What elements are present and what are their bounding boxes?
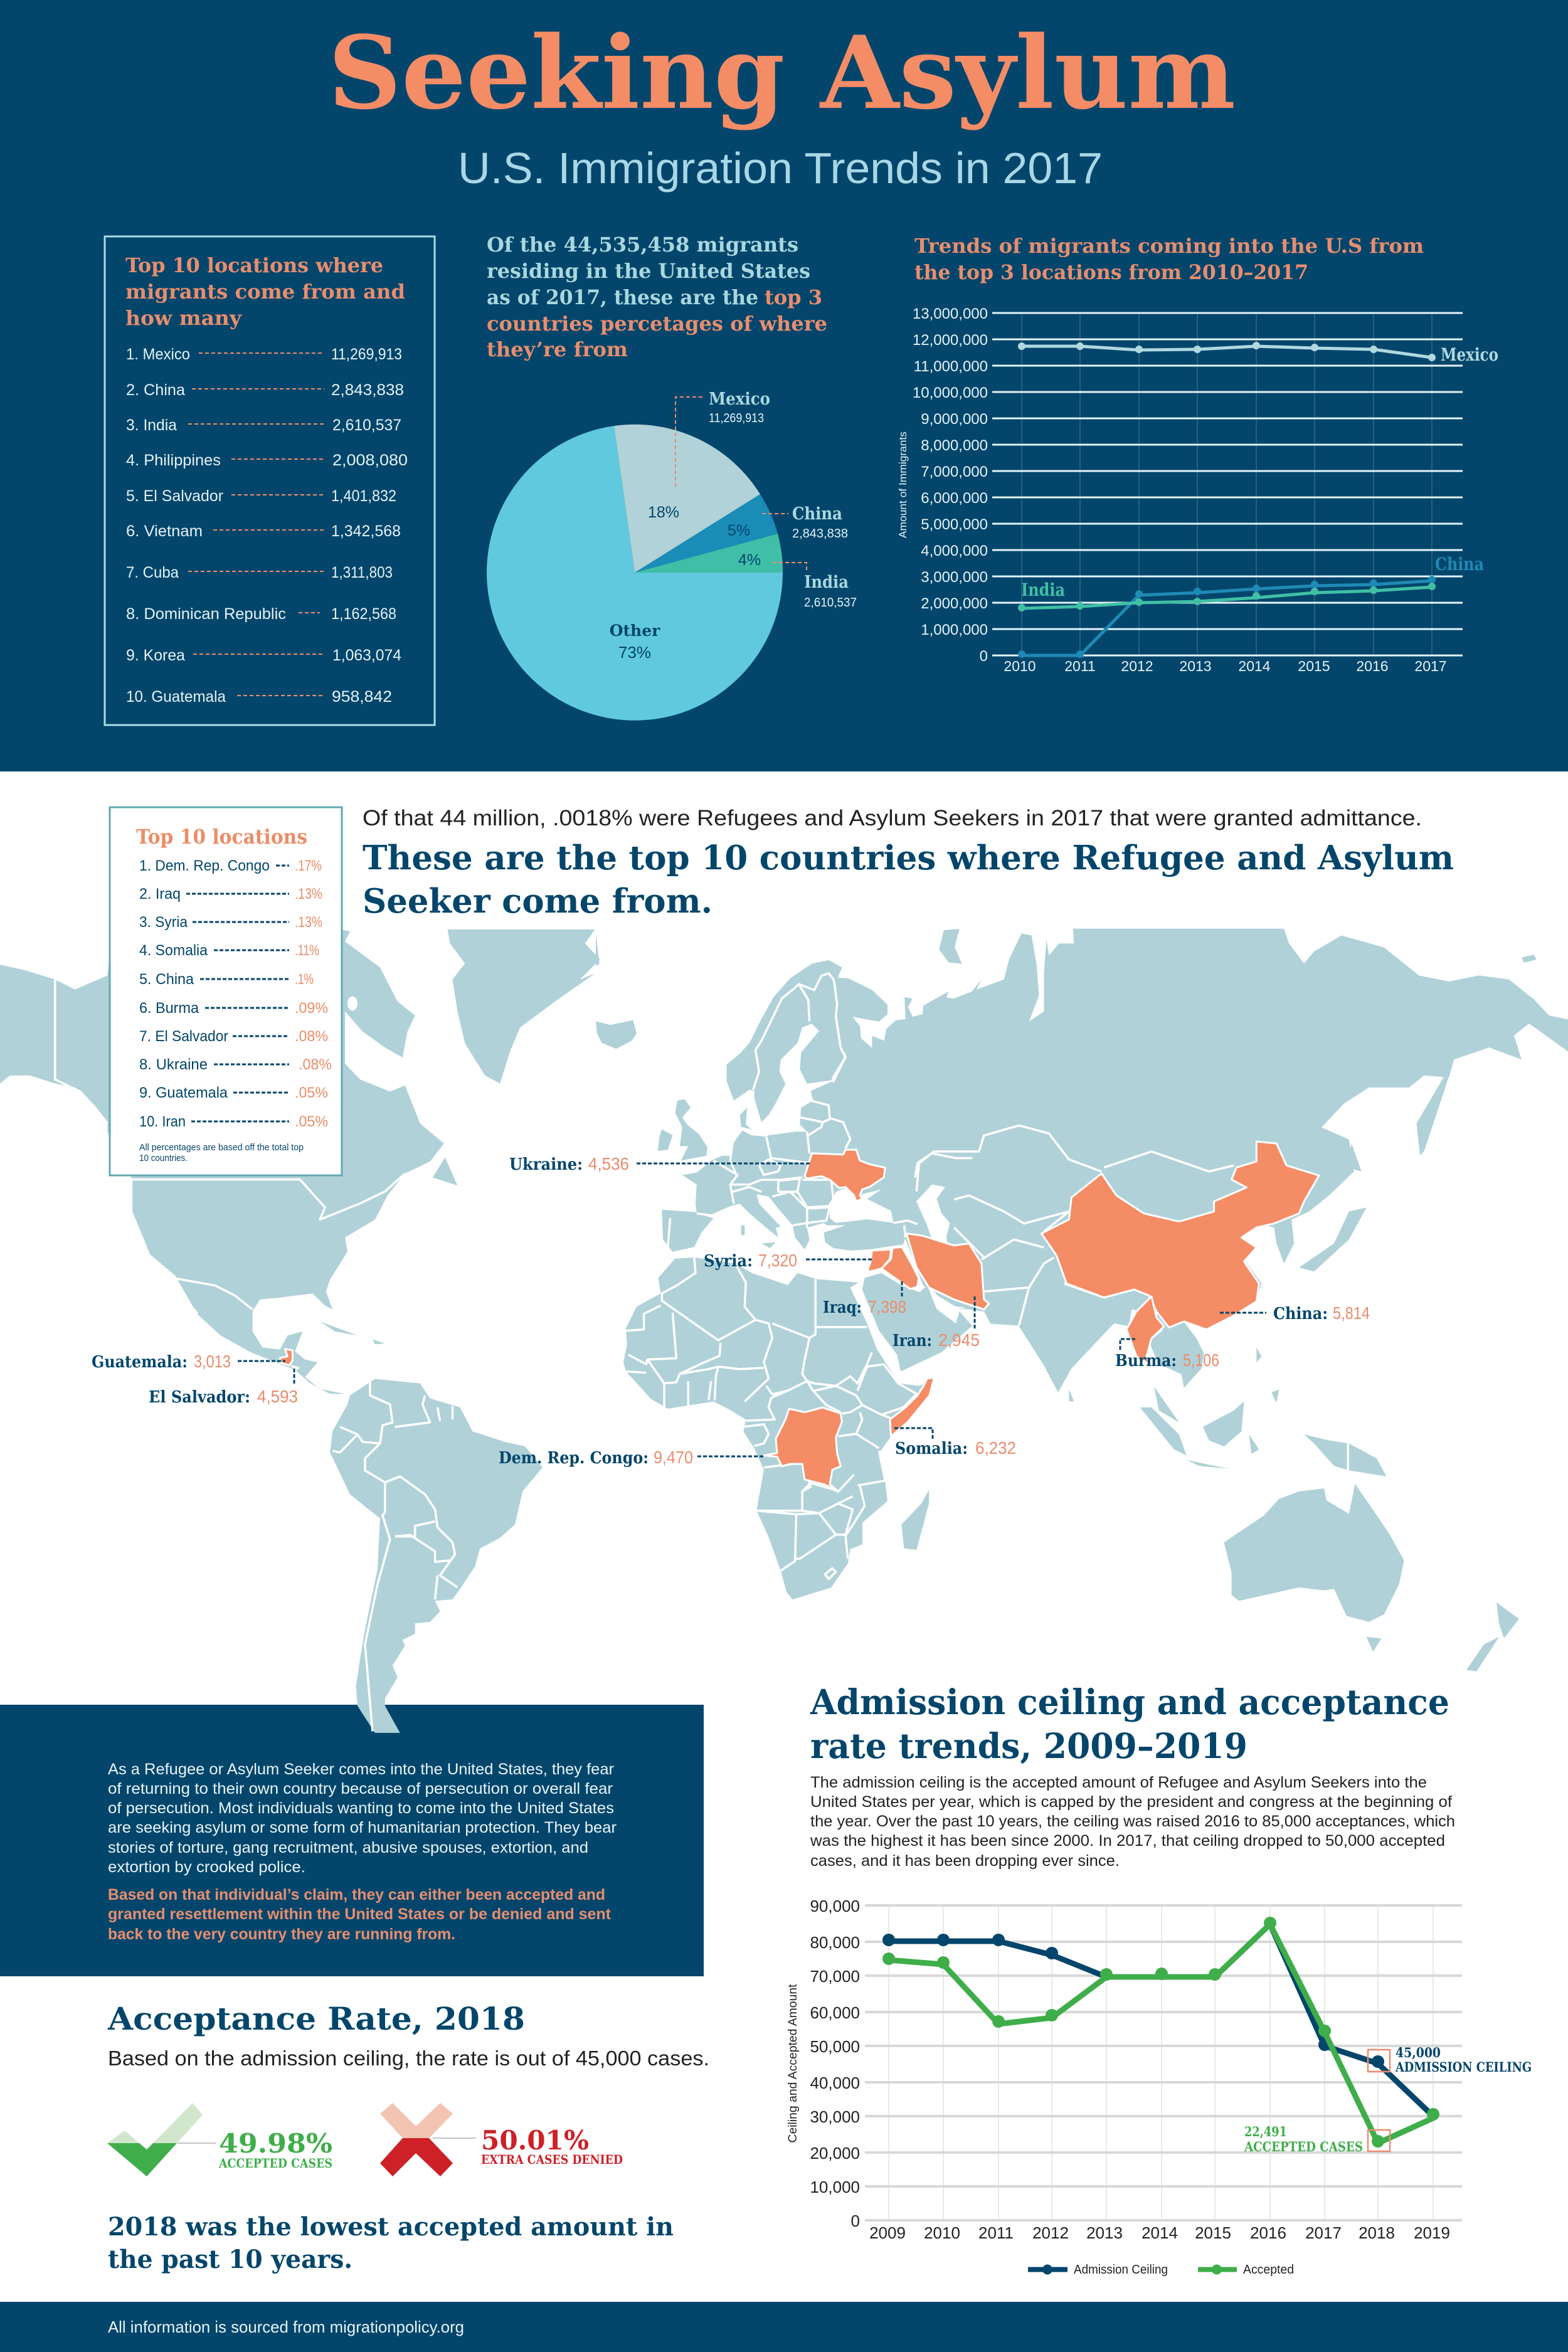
stat: accepted cases: ACCEPTED CASES xyxy=(218,2156,332,2171)
section heading: These are the top 10 countries where Refugee and Asylum xyxy=(363,839,1454,877)
admission ceiling paragraph: the year. Over the past 10 years, the ceiling was raised 2016 to 85,000 acceptances, which xyxy=(810,1813,1455,1830)
map callout: Syria: Syria: xyxy=(704,1252,753,1271)
line chart: admission ceiling vs accepted: 2012 xyxy=(1032,2223,1069,2242)
line chart: migrant trends: 2016 xyxy=(1356,658,1389,674)
pie label: Mexico: Mexico xyxy=(709,389,770,409)
refugee share rows: .09% xyxy=(295,1000,328,1017)
legend xyxy=(1028,2263,1294,2277)
line chart: admission ceiling vs accepted xyxy=(787,1897,1532,2277)
highlighted text: granted resettlement within the United States or be denied and sent xyxy=(108,1905,612,1923)
axis label: Ceiling and Accepted Amount xyxy=(787,1984,800,2143)
pie label: India: India xyxy=(804,573,849,592)
migrant count rows: 2,610,537 xyxy=(332,416,401,434)
country: Dem. Rep. Congo xyxy=(764,1407,842,1490)
refugee share rows: .13% xyxy=(295,886,322,903)
icon: x mark xyxy=(380,2103,476,2176)
line chart: migrant trends: 10,000,000 xyxy=(913,384,988,401)
stat: denied cases: 50.01% xyxy=(481,2125,589,2156)
admission ceiling paragraph: The admission ceiling is the accepted amount of Refugee and Asylum Seekers into the xyxy=(810,1774,1427,1791)
line chart: admission ceiling vs accepted: 60,000 xyxy=(810,2003,860,2022)
legend: Accepted xyxy=(1243,2263,1294,2277)
pie heading: residing in the United States xyxy=(487,259,810,283)
footnote: All percentages are based off the total top xyxy=(139,1142,304,1153)
map callout: Syria xyxy=(704,1251,872,1271)
map callout: Burma xyxy=(1115,1339,1219,1370)
line chart: migrant trends: 7,000,000 xyxy=(921,464,988,480)
line chart: migrant trends: 2010 xyxy=(1004,658,1036,674)
map callout: El Salvador: El Salvador: xyxy=(149,1388,250,1407)
pie label: Mexico: 11,269,913 xyxy=(709,411,764,425)
pie chart: 4% xyxy=(738,551,761,569)
stat: accepted cases: 49.98% xyxy=(219,2128,332,2159)
pie heading: they’re from xyxy=(487,337,628,361)
line chart: admission ceiling vs accepted: 0 xyxy=(851,2212,860,2230)
map callout: Dem. Rep. Congo xyxy=(499,1448,764,1468)
line chart: admission ceiling vs accepted: 90,000 xyxy=(810,1897,860,1915)
pie heading: Of the 44,535,458 migrants xyxy=(487,233,798,257)
country: Ukraine xyxy=(805,1150,885,1201)
line chart: migrant trends: 12,000,000 xyxy=(913,332,988,349)
map callout: China xyxy=(1220,1303,1370,1323)
header panel xyxy=(0,0,1568,771)
line chart: migrant trends: 13,000,000 xyxy=(913,305,988,322)
panel: refugee context text: extortion by crooked police. xyxy=(108,1858,305,1876)
stat: denied cases: EXTRA CASES DENIED xyxy=(481,2152,623,2167)
pie label: China: 2,843,838 xyxy=(792,527,848,541)
migrant count rows: 958,842 xyxy=(332,688,392,706)
world map xyxy=(0,929,1568,1733)
map callout: Iran xyxy=(893,1296,980,1350)
country: Syria xyxy=(867,1249,891,1272)
pie heading: as of 2017, these are the xyxy=(487,285,758,309)
country: El Salvador xyxy=(292,1366,299,1370)
series: China xyxy=(1018,576,1436,658)
refugee share rows: 3. Syria xyxy=(139,914,188,931)
panel: refugee context text: stories of torture, gang recruitment, abusive spouses, extortion, and xyxy=(108,1839,588,1857)
line chart: admission ceiling vs accepted: 2017 xyxy=(1305,2223,1342,2242)
refugee share rows: .11% xyxy=(295,942,319,959)
line chart: migrant trends: 2011 xyxy=(1064,658,1096,674)
series label: Mexico: Mexico xyxy=(1441,344,1498,365)
panel: top 10 refugee locations xyxy=(110,807,342,1175)
migrant count rows: 2,008,080 xyxy=(332,452,408,469)
country: Guatemala xyxy=(280,1349,292,1365)
line chart: admission ceiling vs accepted: 2015 xyxy=(1195,2223,1231,2242)
line chart: migrant trends: 8,000,000 xyxy=(921,437,988,454)
line chart: migrant trends: 9,000,000 xyxy=(921,411,988,428)
refugee share rows: .13% xyxy=(295,914,322,931)
refugee share rows: 5. China xyxy=(139,971,194,988)
map callout: Iraq: 7,398 xyxy=(868,1297,906,1316)
map callout: Somalia xyxy=(894,1428,1016,1458)
line chart: admission ceiling vs accepted: 2019 xyxy=(1414,2223,1450,2242)
line chart heading: Trends of migrants coming into the U.S from xyxy=(914,234,1424,258)
pie heading: top 3 xyxy=(765,285,822,309)
admission ceiling paragraph: was the highest it has been since 2000. In 2017, that ceiling dropped to 50,000 accepted xyxy=(810,1832,1445,1850)
series: admission ceiling xyxy=(882,1924,1433,2116)
line chart: admission ceiling vs accepted: 10,000 xyxy=(810,2178,860,2196)
line chart: migrant trends: 2012 xyxy=(1121,658,1153,674)
country: China xyxy=(1042,1142,1319,1330)
highlight boxes xyxy=(1368,2050,1390,2151)
refugee share rows: 2. Iraq xyxy=(139,886,181,903)
refugee share rows: .17% xyxy=(295,857,322,874)
panel: refugee context text: of returning to their own country because of persecution or overall fear xyxy=(108,1780,613,1798)
map callout: Ukraine: Ukraine: xyxy=(509,1155,583,1174)
line chart: admission ceiling vs accepted: 80,000 xyxy=(810,1933,860,1952)
migrant count rows: 5. El Salvador xyxy=(126,487,223,505)
migrant count rows: 4. Philippines xyxy=(126,452,221,469)
conclusion text: the past 10 years. xyxy=(108,2245,352,2274)
line chart: migrant trends: 1,000,000 xyxy=(921,622,988,638)
conclusion text: 2018 was the lowest accepted amount in xyxy=(108,2212,674,2242)
callout: accepted cases: 22,491 xyxy=(1244,2124,1287,2139)
line chart: migrant trends: 4,000,000 xyxy=(921,543,988,559)
line chart: admission ceiling vs accepted: 2018 xyxy=(1359,2223,1395,2242)
map callout: Iraq xyxy=(823,1281,906,1317)
migrant count rows: 1. Mexico xyxy=(126,346,190,363)
map callout: China: China: xyxy=(1273,1305,1328,1323)
line chart: admission ceiling vs accepted: 2010 xyxy=(924,2223,960,2242)
map callout: Burma: 5,106 xyxy=(1183,1350,1219,1370)
map callout: Ukraine xyxy=(509,1154,812,1174)
migrant count rows xyxy=(126,346,408,706)
line chart: migrant trends: 6,000,000 xyxy=(921,490,988,507)
intro sentence: Of that 44 million, .0018% were Refugees and Asylum Seekers in 2017 that were granted admittance. xyxy=(363,806,1422,830)
migrant count rows: 2,843,838 xyxy=(331,381,404,399)
series label: India: India xyxy=(1021,580,1065,600)
map callout: Iran: 2,945 xyxy=(938,1330,980,1350)
line chart: migrant trends xyxy=(897,305,1498,674)
pie heading: countries percetages of where xyxy=(487,312,827,336)
refugee share rows: 9. Guatemala xyxy=(139,1084,228,1101)
stat: accepted cases xyxy=(218,2128,332,2171)
series: Mexico xyxy=(1018,342,1436,361)
title: Seeking Asylum xyxy=(328,14,1236,132)
series label: China: China xyxy=(1435,554,1484,575)
acceptance rate sentence: Based on the admission ceiling, the rate is out of 45,000 cases. xyxy=(108,2047,709,2070)
panel: top 10 migrant locations xyxy=(105,236,435,725)
line chart: admission ceiling vs accepted: 2014 xyxy=(1142,2223,1178,2242)
migrant count rows: 1,401,832 xyxy=(331,487,396,505)
line chart: migrant trends: 0 xyxy=(980,648,988,665)
map callout: Somalia: 6,232 xyxy=(975,1438,1016,1458)
line chart: admission ceiling vs accepted: 2013 xyxy=(1086,2223,1123,2242)
series: India xyxy=(1018,583,1436,612)
migrant count rows: 1,311,803 xyxy=(331,564,393,581)
series: accepted xyxy=(882,1917,1439,2148)
line chart: admission ceiling vs accepted: 70,000 xyxy=(810,1967,860,1986)
migrant count rows: 9. Korea xyxy=(126,647,185,664)
refugee share rows: .08% xyxy=(295,1028,328,1045)
list heading: how many xyxy=(125,306,242,330)
migrant count rows: 6. Vietnam xyxy=(126,522,203,540)
map callout: Guatemala xyxy=(92,1352,285,1372)
refugee share rows: 10. Iran xyxy=(139,1113,186,1130)
stat: denied cases xyxy=(481,2125,623,2167)
highlighted text: Based on that individual’s claim, they can either been accepted and xyxy=(108,1886,605,1904)
legend: Admission Ceiling xyxy=(1074,2263,1168,2277)
icon: check mark xyxy=(107,2103,216,2176)
migrant count rows: 10. Guatemala xyxy=(126,688,226,706)
map callout: Dem. Rep. Congo: 9,470 xyxy=(654,1448,693,1467)
line chart: admission ceiling vs accepted: 40,000 xyxy=(810,2074,860,2092)
list heading: migrants come from and xyxy=(125,280,405,304)
pie chart: Other xyxy=(610,622,660,640)
line chart: migrant trends: 2017 xyxy=(1414,658,1447,674)
line chart: admission ceiling vs accepted: 20,000 xyxy=(810,2144,860,2163)
pie label: India: 2,610,537 xyxy=(804,596,857,610)
line chart: migrant trends: 2015 xyxy=(1298,658,1330,674)
refugee share rows xyxy=(139,857,332,1130)
country: Iran xyxy=(906,1234,989,1310)
line chart: migrant trends: 5,000,000 xyxy=(921,516,988,533)
heading: admission ceiling: Admission ceiling and acceptance xyxy=(810,1682,1449,1722)
map callout: Ukraine: 4,536 xyxy=(588,1154,629,1173)
pie label: China: China xyxy=(792,504,842,524)
map callout: Burma: Burma: xyxy=(1115,1352,1177,1370)
refugee share rows: 7. El Salvador xyxy=(139,1028,228,1045)
line chart: migrant trends: 2,000,000 xyxy=(921,595,988,612)
map callout: Guatemala: Guatemala: xyxy=(92,1353,188,1372)
migrant count rows: 1,342,568 xyxy=(331,522,401,540)
refugee share rows: .08% xyxy=(299,1056,332,1073)
map callout: Iran: Iran: xyxy=(893,1332,932,1350)
pie chart: 18% xyxy=(648,504,679,521)
pie chart xyxy=(487,389,857,721)
map callout: Iraq: Iraq: xyxy=(823,1298,862,1317)
migrant count rows: 1,162,568 xyxy=(331,605,396,623)
country: Somalia xyxy=(890,1377,935,1436)
pie chart: 73% xyxy=(618,643,651,662)
callout: admission ceiling: 45,000 xyxy=(1396,2045,1441,2060)
country: Burma xyxy=(1126,1296,1164,1376)
line chart: migrant trends: 2013 xyxy=(1179,658,1212,674)
refugee share rows: .1% xyxy=(295,971,314,988)
refugee share rows: 8. Ukraine xyxy=(139,1056,208,1073)
highlighted text: back to the very country they are running from. xyxy=(108,1926,455,1943)
migrant count rows: 1,063,074 xyxy=(332,647,401,664)
list heading: Top 10 locations where xyxy=(125,253,383,277)
refugee share rows: 6. Burma xyxy=(139,1000,199,1017)
footer xyxy=(0,2302,1568,2352)
refugee share rows: .05% xyxy=(295,1084,328,1101)
migrant count rows: 8. Dominican Republic xyxy=(126,605,286,623)
line chart heading: the top 3 locations from 2010–2017 xyxy=(914,260,1308,284)
map callout: El Salvador xyxy=(149,1369,298,1407)
pie chart: 5% xyxy=(728,522,750,539)
panel: refugee context text: As a Refugee or Asylum Seeker comes into the United States, they fear xyxy=(108,1761,614,1778)
line chart: migrant trends: 2014 xyxy=(1238,658,1271,674)
map callout: Guatemala: 3,013 xyxy=(194,1352,231,1371)
map callout: Syria: 7,320 xyxy=(758,1251,797,1270)
footer: All information is sourced from migrationpolicy.org xyxy=(108,2318,464,2336)
panel: refugee context text xyxy=(0,1705,704,1976)
map callout: China: 5,814 xyxy=(1333,1303,1370,1323)
panel heading: Top 10 locations xyxy=(136,825,307,849)
panel: refugee context text: of persecution. Most individuals wanting to come into the United States xyxy=(108,1799,614,1817)
line chart: migrant trends: 11,000,000 xyxy=(914,358,988,375)
axis label: Amount of Immigrants xyxy=(897,432,909,538)
line chart: admission ceiling vs accepted: 2016 xyxy=(1250,2223,1286,2242)
refugee share rows: .05% xyxy=(295,1113,328,1130)
migrant count rows: 7. Cuba xyxy=(126,564,179,581)
refugee share rows: 1. Dem. Rep. Congo xyxy=(139,857,270,874)
country: Iraq xyxy=(881,1247,919,1289)
admission ceiling paragraph: cases, and it has been dropping ever since. xyxy=(810,1852,1120,1870)
line chart: admission ceiling vs accepted: 30,000 xyxy=(810,2107,860,2126)
map callout: Somalia: Somalia: xyxy=(895,1439,968,1458)
refugee share rows: 4. Somalia xyxy=(139,942,208,959)
line chart: admission ceiling vs accepted: 2011 xyxy=(978,2223,1014,2242)
callout: accepted cases: ACCEPTED CASES xyxy=(1244,2139,1363,2154)
migrant count rows: 3. India xyxy=(126,416,177,434)
panel: refugee context text: are seeking asylum or some form of humanitarian protection. They bear xyxy=(108,1819,617,1836)
heading: acceptance rate: Acceptance Rate, 2018 xyxy=(107,2000,525,2037)
section heading: Seeker come from. xyxy=(363,882,712,921)
callout: admission ceiling: ADMISSION CEILING xyxy=(1395,2059,1532,2075)
subtitle: U.S. Immigration Trends in 2017 xyxy=(458,144,1103,193)
migrant count rows: 11,269,913 xyxy=(331,346,402,363)
line chart: admission ceiling vs accepted: 50,000 xyxy=(810,2037,860,2056)
map callout: Dem. Rep. Congo: Dem. Rep. Congo: xyxy=(499,1449,649,1468)
admission ceiling paragraph: United States per year, which is capped by the president and congress at the beginning of xyxy=(810,1793,1452,1811)
footnote: 10 countries. xyxy=(139,1153,188,1163)
line chart: migrant trends: 3,000,000 xyxy=(921,569,988,586)
heading: admission ceiling: rate trends, 2009–2019 xyxy=(810,1725,1248,1766)
map callout: El Salvador: 4,593 xyxy=(257,1387,298,1406)
migrant count rows: 2. China xyxy=(126,381,185,399)
line chart: admission ceiling vs accepted: 2009 xyxy=(869,2223,906,2242)
